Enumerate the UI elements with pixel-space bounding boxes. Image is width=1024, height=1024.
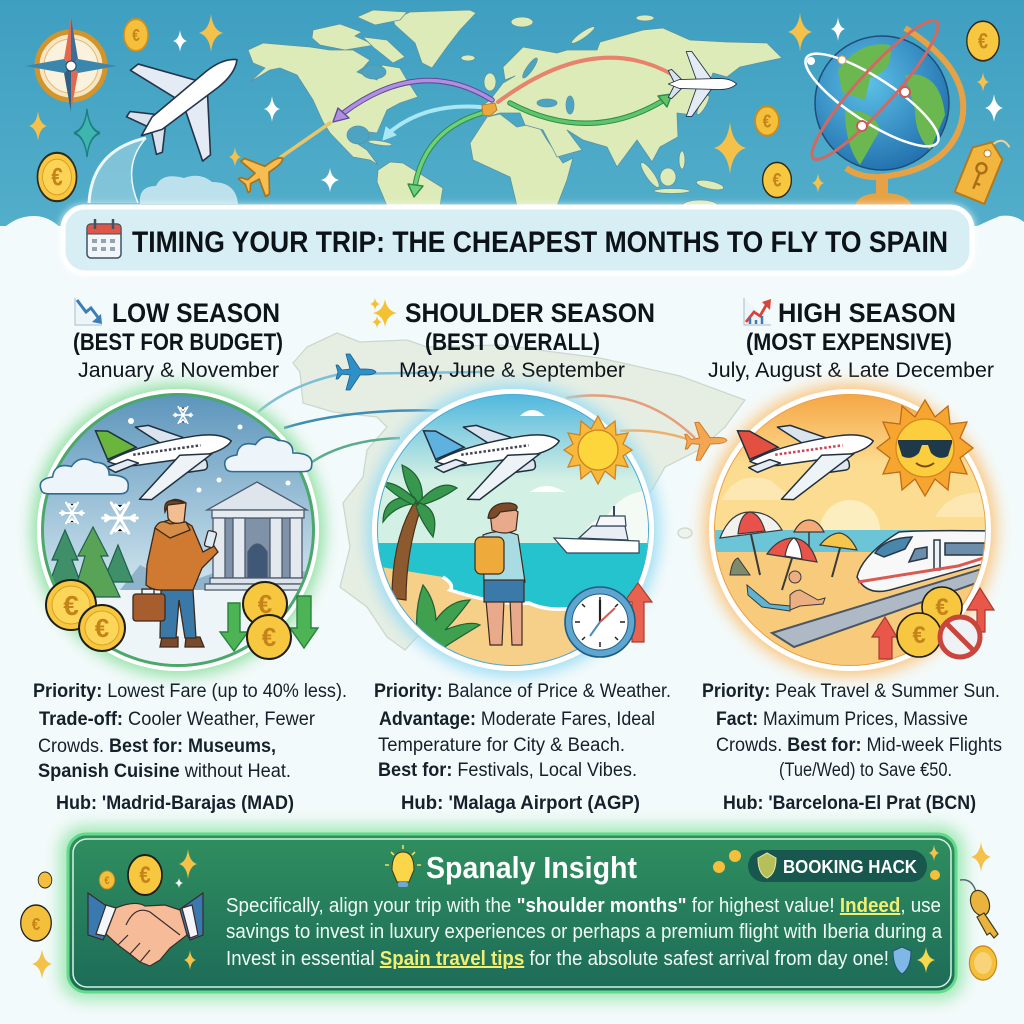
small yellow plane [231, 141, 295, 203]
insight text: Invest in essential Spain travel tips for the absolute safest arrival from day one! [226, 948, 889, 970]
flight routes from Spain [281, 58, 673, 197]
column: shoulder season heading [370, 298, 655, 382]
globe on stand [795, 10, 963, 206]
text block: shoulder season details [374, 681, 671, 814]
icon: coins and sparkles [99, 849, 197, 970]
coins left: € [63, 590, 79, 621]
yacht [554, 506, 639, 553]
text block: shoulder season details: Priority: Balance of Price & Weather. [374, 681, 671, 702]
traveller with backpack [475, 503, 525, 645]
coins, arrows and no sign: € [935, 594, 949, 621]
text block: low season details [33, 681, 347, 814]
plane with green tail [95, 412, 238, 506]
panel: Spanaly Insight [60, 826, 964, 1000]
header coins: € [772, 169, 782, 191]
badge: booking hack [713, 845, 940, 882]
header sparkles [29, 13, 1003, 193]
icon: falling chart [75, 298, 102, 325]
coins left: € [95, 613, 109, 643]
icon: coins and sparkles: € [104, 875, 110, 887]
column: shoulder season heading: SHOULDER SEASON [405, 298, 655, 328]
icon: coins and sparkles: € [139, 861, 151, 888]
column: low season heading [73, 298, 283, 382]
Spain marker [482, 103, 497, 116]
text block: high season details: Priority: Peak Travel & Summer Sun. [702, 681, 1000, 702]
high-speed train [857, 531, 990, 591]
sun [564, 416, 632, 484]
compass [25, 18, 117, 112]
season routes [258, 372, 695, 462]
snow dots [128, 418, 290, 500]
arrows down and coins right [220, 582, 318, 659]
header coins: € [51, 162, 63, 191]
panel: shoulder season scene [367, 384, 660, 680]
plane over Asia [668, 52, 737, 116]
clouds [40, 459, 128, 494]
arrows down and coins right: € [262, 622, 276, 652]
plane with red tail [737, 412, 880, 506]
column: shoulder season heading: May, June & September [399, 359, 625, 382]
icon: rising chart [744, 298, 771, 325]
icon: shield and sparkle [893, 947, 935, 974]
small orange plane [684, 421, 728, 461]
header coins: € [763, 110, 772, 132]
sun with sunglasses [877, 400, 973, 496]
coins, arrows and no sign [872, 587, 994, 659]
icon: snowflakes [60, 407, 193, 533]
decor: outside coins, sparkles and key [21, 842, 998, 980]
coins left [46, 580, 125, 651]
insight text: savings to invest in luxury experiences or perhaps a premium flight with Iberia during a [226, 921, 943, 943]
insight heading: Spanaly Insight [426, 850, 637, 885]
icon: light bulb [385, 845, 421, 887]
column: high season heading [708, 298, 994, 382]
person in orange coat [133, 499, 218, 647]
small blue plane [336, 354, 376, 390]
clock with up arrow [565, 583, 652, 657]
text block: low season details: Priority: Lowest Fare (up to 40% less). [33, 681, 347, 702]
text block: low season details: Trade-off: Cooler Weather, Fewer [39, 709, 316, 730]
trees [46, 527, 133, 597]
beach umbrellas [720, 512, 857, 590]
train tracks [772, 568, 985, 647]
title banner [60, 205, 975, 275]
text block: shoulder season details: Best for: Festivals, Local Vibes. [378, 760, 637, 781]
plane with blue tail [423, 412, 566, 506]
faint map of Spain [293, 333, 745, 650]
decor: outside coins, sparkles and key: € [32, 914, 40, 934]
icon: calendar [87, 219, 121, 258]
text block: high season details: Fact: Maximum Prices, Massive [716, 709, 968, 730]
header coins: € [132, 26, 140, 46]
text block: shoulder season details: Temperature for City & Beach. [378, 735, 625, 756]
text block: low season details: Hub: 'Madrid-Barajas (MAD) [56, 793, 294, 814]
arrows down and coins right: € [258, 589, 272, 619]
icon: sparkles [370, 298, 397, 328]
text block: shoulder season details: Hub: 'Malaga Airport (AGP) [401, 793, 640, 814]
panel: high season scene [704, 384, 996, 680]
header coins: € [978, 30, 988, 54]
text block: high season details: Hub: 'Barcelona-El Prat (BCN) [723, 793, 976, 814]
panel: low season scene [32, 384, 324, 676]
text block: low season details: Crowds. Best for: Museums, [38, 736, 276, 757]
building [205, 482, 311, 590]
column: high season heading: July, August & Late December [708, 359, 994, 382]
text block: shoulder season details: Advantage: Moderate Fares, Ideal [379, 709, 655, 730]
text block: high season details [702, 681, 1002, 814]
column: high season heading: (MOST EXPENSIVE) [746, 329, 952, 356]
column: low season heading: January & November [78, 359, 279, 382]
text block: high season details: (Tue/Wed) to Save €50. [779, 760, 952, 781]
world map [248, 10, 782, 212]
text block: high season details: Crowds. Best for: Mid-week Flights [716, 735, 1002, 756]
price tag [955, 131, 1011, 205]
column: low season heading: LOW SEASON [112, 298, 280, 328]
header sky banner [0, 0, 1024, 226]
text block: low season details: Spanish Cuisine without Heat. [38, 761, 291, 782]
side clouds [0, 216, 1024, 286]
column: low season heading: (BEST FOR BUDGET) [73, 329, 283, 356]
icon: handshake [88, 893, 203, 966]
badge: booking hack: BOOKING HACK [783, 856, 918, 877]
coins, arrows and no sign: € [912, 622, 926, 649]
column: high season heading: HIGH SEASON [778, 298, 956, 328]
column: shoulder season heading: (BEST OVERALL) [425, 329, 600, 356]
sunbather and lounger [730, 558, 825, 611]
insight text: Specifically, align your trip with the "shoulder months" for highest value! Indeed, use [226, 895, 941, 917]
insight text [226, 895, 943, 970]
contrail and cloud [89, 138, 238, 204]
large airplane [105, 14, 273, 181]
header coins [37, 19, 999, 201]
palm tree [382, 465, 480, 650]
